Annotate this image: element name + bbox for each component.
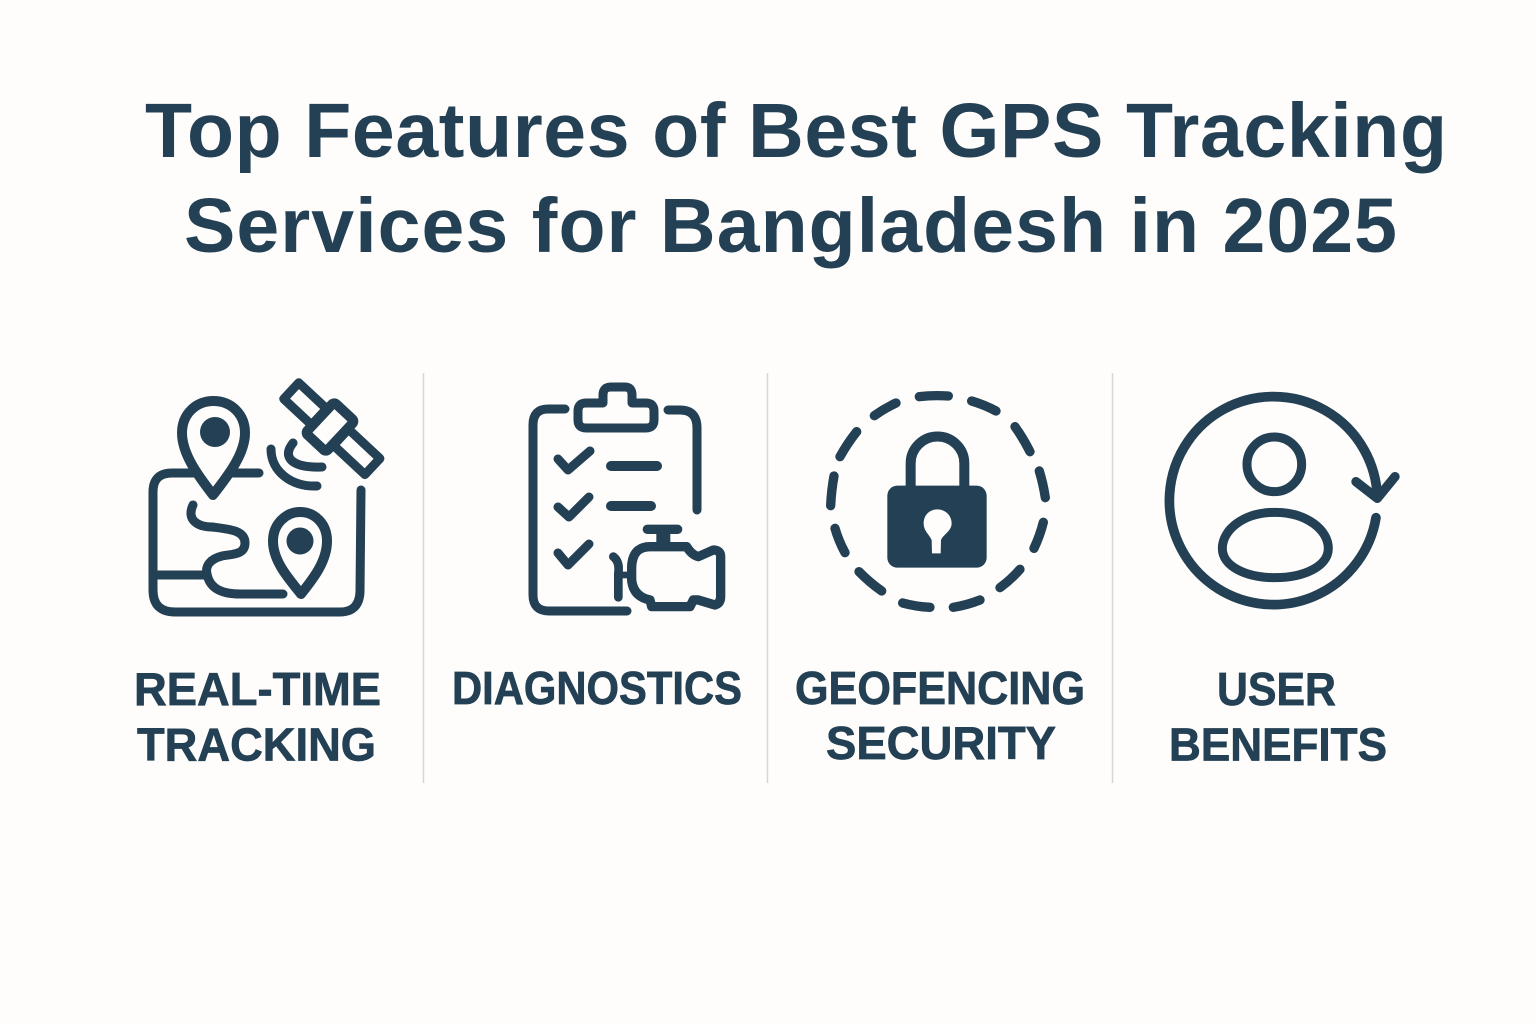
panel: user benefits xyxy=(1169,397,1395,770)
panel: real-time tracking xyxy=(134,375,387,770)
icon: user in circular arrow xyxy=(1169,397,1395,605)
label: user benefits xyxy=(1169,663,1387,770)
label: geofencing security: GEOFENCING xyxy=(795,662,1085,714)
title: Top Features of Best GPS Tracking xyxy=(145,88,1447,174)
label: real-time tracking: TRACKING xyxy=(137,718,376,770)
panel: geofencing security xyxy=(795,396,1085,769)
label: real-time tracking: REAL-TIME xyxy=(134,663,381,715)
label: diagnostics: DIAGNOSTICS xyxy=(452,662,742,714)
label: geofencing security xyxy=(795,662,1085,769)
icon: padlock in dashed circle xyxy=(831,396,1045,607)
label: user benefits: BENEFITS xyxy=(1169,718,1387,770)
icon: clipboard checklist with engine xyxy=(533,387,721,611)
label: real-time tracking xyxy=(134,663,381,770)
icon: map with pins and satellite xyxy=(153,375,387,612)
panel: diagnostics xyxy=(452,387,742,714)
label: user benefits: USER xyxy=(1217,663,1336,715)
title: Services for Bangladesh in 2025 xyxy=(184,183,1397,269)
title xyxy=(145,88,1447,269)
label: geofencing security: SECURITY xyxy=(826,717,1056,769)
